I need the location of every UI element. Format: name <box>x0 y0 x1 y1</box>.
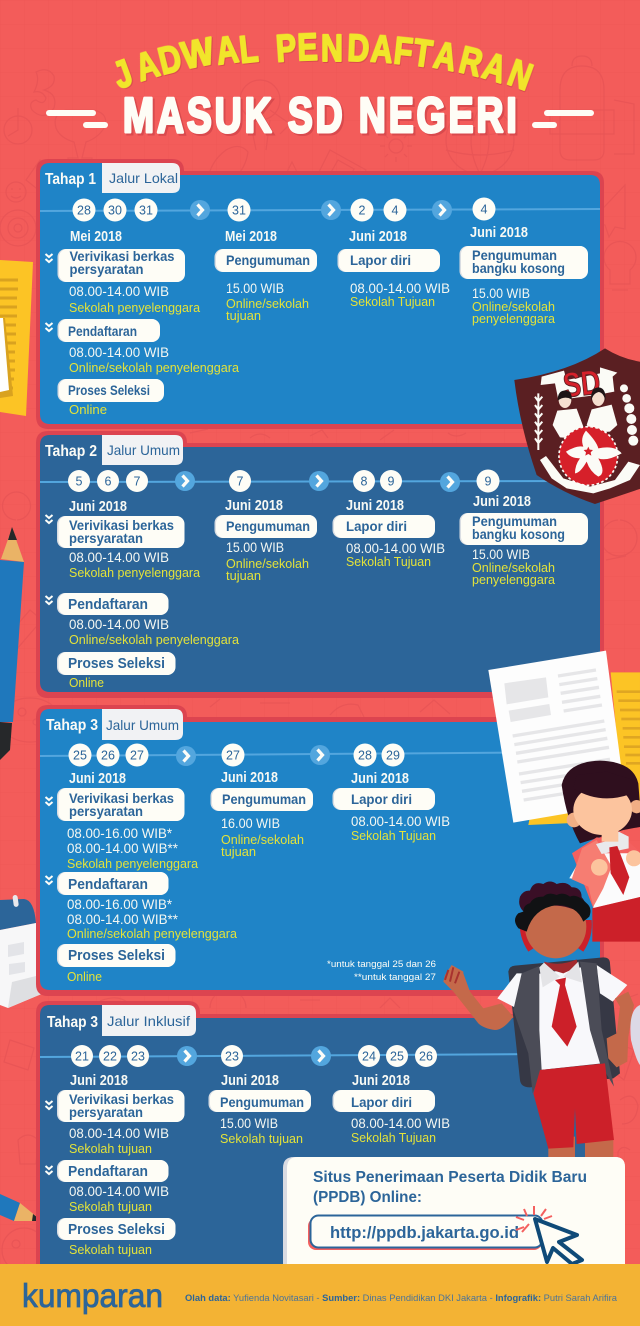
timeline: 22 <box>103 1050 117 1064</box>
timeline: 21 <box>75 1050 89 1064</box>
column: pengumuman: tujuan <box>226 308 261 323</box>
column: pengumuman <box>208 1073 311 1146</box>
heading: Jadwal Pendaftaran: W <box>178 29 218 77</box>
column: bangku kosong <box>460 494 588 587</box>
timeline: 4 <box>392 204 399 218</box>
column: pengumuman: tujuan <box>226 568 261 583</box>
column: lapor diri <box>338 229 450 309</box>
column: seleksi: 08.00-14.00 WIB <box>69 283 169 299</box>
timeline: 27 <box>130 748 144 762</box>
heading: Jadwal Pendaftaran: J <box>108 52 138 97</box>
column: lapor diri <box>332 771 450 843</box>
emblem: SD shield: SD <box>561 363 602 405</box>
timeline <box>40 744 600 766</box>
timeline: 31 <box>232 204 246 218</box>
column: seleksi: Verivikasi berkas <box>69 1091 174 1107</box>
URL box <box>308 1216 542 1250</box>
tab: jalur umum <box>46 709 183 740</box>
column: seleksi <box>46 1073 184 1257</box>
column: seleksi: 08.00-14.00 WIB** <box>67 840 179 856</box>
column: lapor diri: Juni 2018 <box>346 498 404 514</box>
column: seleksi: Juni 2018 <box>70 1073 128 1089</box>
column: seleksi: persyaratan <box>69 1104 143 1120</box>
column: seleksi: Mei 2018 <box>70 229 122 245</box>
decoration: paper and yellow sheet <box>488 651 640 825</box>
column: lapor diri: 08.00-14.00 WIB <box>346 540 445 556</box>
card: PPDB website <box>283 1157 625 1264</box>
column: bangku kosong: 15.00 WIB <box>472 546 530 562</box>
column: seleksi: Juni 2018 <box>69 771 126 787</box>
column: bangku kosong: bangku kosong <box>472 526 565 542</box>
column: lapor diri: 08.00-14.00 WIB <box>350 280 450 296</box>
heading: Jadwal Pendaftaran: E <box>297 27 318 69</box>
column: seleksi: Pendaftaran <box>68 596 148 613</box>
column: pengumuman <box>214 229 317 323</box>
heading: Jadwal Pendaftaran: A <box>431 34 460 80</box>
column: seleksi <box>46 229 240 417</box>
panel: tahap 3 jalur umum <box>36 705 604 996</box>
column: seleksi: Sekolah penyelenggara <box>69 565 201 580</box>
column: pengumuman: Juni 2018 <box>221 770 278 786</box>
column: pengumuman: 16.00 WIB <box>221 815 280 831</box>
column: lapor diri: Lapor diri <box>350 252 411 268</box>
timeline: 29 <box>386 748 400 762</box>
tab: jalur lokal: Jalur Lokal <box>109 170 178 186</box>
tab: jalur lokal <box>45 163 180 193</box>
column: pengumuman: 15.00 WIB <box>226 280 284 296</box>
column: pengumuman: Juni 2018 <box>225 498 283 514</box>
column: seleksi: Sekolah penyelenggara <box>69 300 201 315</box>
column: pengumuman: Pengumuman <box>226 252 310 268</box>
column: pengumuman: Pengumuman <box>226 518 310 534</box>
column: bangku kosong: Pengumuman <box>472 247 557 263</box>
tab: jalur umum <box>45 435 183 465</box>
column: bangku kosong: Juni 2018 <box>473 494 531 510</box>
panel: tahap 2 jalur umum <box>36 431 604 698</box>
heading: Jadwal Pendaftaran: A <box>369 28 394 72</box>
emblem: SD shield <box>514 348 640 504</box>
column: seleksi: Pendaftaran <box>68 1163 148 1180</box>
heading: Jadwal Pendaftaran: R <box>455 39 487 85</box>
illustration: girl student <box>562 761 640 942</box>
column: seleksi: Online/sekolah penyelenggara <box>67 926 238 941</box>
tab: jalur umum: Jalur Umum <box>107 442 180 458</box>
column: seleksi: 08.00-14.00 WIB <box>69 1125 169 1141</box>
timeline: 31 <box>139 204 153 218</box>
timeline: 8 <box>361 474 368 488</box>
column: seleksi: persyaratan <box>70 261 144 277</box>
timeline: 27 <box>226 748 240 762</box>
column: pengumuman: Online/sekolah <box>226 296 309 311</box>
column: seleksi: Proses Seleksi <box>68 947 165 964</box>
footnotes <box>327 959 436 983</box>
column: pengumuman: Pengumuman <box>222 791 306 807</box>
timeline: 23 <box>131 1050 145 1064</box>
timeline <box>40 470 600 492</box>
column: pengumuman: Pengumuman <box>220 1094 304 1110</box>
timeline: 7 <box>237 474 244 488</box>
timeline: 23 <box>225 1050 239 1064</box>
column: seleksi: Sekolah penyelenggara <box>67 856 199 871</box>
decoration: blue pencil <box>0 527 24 760</box>
column: seleksi <box>46 771 238 984</box>
timeline: 25 <box>73 748 87 762</box>
footer credits: Olah data: Yufienda Novitasari - Sumber: Dinas Pendidikan DKI Jakarta - Infografik: Putri Sarah Arifira <box>185 1293 618 1304</box>
column: pengumuman: Online/sekolah <box>221 832 304 847</box>
column: seleksi: Verivikasi berkas <box>69 517 174 533</box>
timeline: 6 <box>105 474 112 488</box>
tab: jalur umum: Tahap 3 <box>46 717 98 734</box>
column: seleksi: 08.00-14.00 WIB <box>69 1183 169 1199</box>
column: seleksi: Sekolah tujuan <box>69 1242 152 1257</box>
column: seleksi: Online/sekolah penyelenggara <box>69 632 240 647</box>
timeline: 28 <box>77 204 91 218</box>
column: bangku kosong: Juni 2018 <box>470 225 528 241</box>
heading: Jadwal Pendaftaran: F <box>392 30 415 74</box>
column: bangku kosong: Pengumuman <box>472 513 557 529</box>
tab: jalur umum: Tahap 2 <box>45 443 97 460</box>
timeline: 26 <box>419 1050 433 1064</box>
decoration: notebook left <box>0 895 51 1008</box>
column: seleksi: 08.00-14.00 WIB <box>69 549 169 565</box>
timeline <box>40 198 600 222</box>
column: seleksi: Juni 2018 <box>69 499 127 515</box>
heading: Masuk SD Negeri: MASUK SD NEGERI <box>123 89 517 143</box>
column: seleksi: Pendaftaran <box>68 323 137 339</box>
column: bangku kosong: penyelenggara <box>472 572 556 587</box>
column: seleksi: Online/sekolah penyelenggara <box>69 360 240 375</box>
card heading <box>313 1169 587 1206</box>
heading: Jadwal Pendaftaran: A <box>214 29 241 73</box>
timeline: 7 <box>134 474 141 488</box>
column: lapor diri: Juni 2018 <box>352 1073 410 1089</box>
card heading: Situs Penerimaan Peserta Didik Baru <box>313 1169 587 1186</box>
column: lapor diri: Lapor diri <box>351 1094 412 1110</box>
column: pengumuman: Sekolah tujuan <box>220 1131 303 1146</box>
timeline <box>40 1045 560 1067</box>
column: seleksi: Proses Seleksi <box>68 382 150 398</box>
heading: Jadwal Pendaftaran: A <box>478 45 511 92</box>
timeline: 30 <box>108 204 122 218</box>
column: seleksi: Verivikasi berkas <box>69 790 174 806</box>
timeline: 2 <box>359 204 366 218</box>
tab: jalur inklusif: Tahap 3 <box>47 1014 98 1031</box>
logo: kumparan: kumparan <box>22 1277 163 1314</box>
column: seleksi: 08.00-14.00 WIB** <box>67 911 179 927</box>
column: seleksi: Sekolah tujuan <box>69 1199 152 1214</box>
illustration: boy student <box>443 895 634 1163</box>
column: lapor diri: Sekolah Tujuan <box>351 828 436 843</box>
column: pengumuman: Mei 2018 <box>225 229 277 245</box>
heading: Jadwal Pendaftaran: D <box>154 37 186 83</box>
heading: Jadwal Pendaftaran: D <box>347 28 370 70</box>
column: seleksi: 08.00-14.00 WIB <box>69 344 169 360</box>
column: seleksi: 08.00-14.00 WIB <box>69 616 169 632</box>
heading: Jadwal Pendaftaran: T <box>411 32 435 76</box>
column: lapor diri: Lapor diri <box>351 791 412 807</box>
tab: jalur lokal: Tahap 1 <box>45 171 96 188</box>
column: pengumuman <box>214 498 317 583</box>
column: seleksi: 08.00-16.00 WIB* <box>67 825 173 841</box>
illustration: boy hair <box>515 881 591 932</box>
column: pengumuman <box>210 770 313 859</box>
timeline: 9 <box>388 474 395 488</box>
column: lapor diri: Sekolah Tujuan <box>350 294 435 309</box>
column: seleksi: 08.00-16.00 WIB* <box>67 896 173 912</box>
panel: tahap 1 jalur lokal <box>36 159 604 429</box>
timeline: 26 <box>101 748 115 762</box>
timeline: 28 <box>358 748 372 762</box>
timeline: 5 <box>76 474 83 488</box>
column: seleksi: Pendaftaran <box>68 876 148 893</box>
column: seleksi: Proses Seleksi <box>68 655 165 672</box>
heading: Jadwal Pendaftaran: A <box>131 43 164 90</box>
title dashes right <box>532 110 594 128</box>
column: pengumuman: 15.00 WIB <box>220 1115 278 1131</box>
decoration: small pencil left <box>0 1194 42 1221</box>
column: seleksi: Verivikasi berkas <box>70 248 175 264</box>
title dashes left <box>46 110 108 128</box>
icon: cursor click <box>516 1206 582 1264</box>
column: lapor diri: Juni 2018 <box>349 229 407 245</box>
illustration: girl leg <box>630 1005 640 1065</box>
column: seleksi: persyaratan <box>69 803 143 819</box>
column: bangku kosong: bangku kosong <box>472 260 565 276</box>
timeline: 25 <box>390 1050 404 1064</box>
column: lapor diri: 08.00-14.00 WIB <box>351 813 450 829</box>
column: lapor diri <box>332 498 445 569</box>
title <box>46 27 594 145</box>
column: seleksi: Sekolah tujuan <box>69 1141 152 1156</box>
tab: jalur inklusif <box>47 1005 196 1036</box>
panel: tahap 3 jalur inklusif <box>36 1001 604 1264</box>
column: pengumuman: tujuan <box>221 844 256 859</box>
column: seleksi: Proses Seleksi <box>68 1221 165 1238</box>
column: pengumuman: Juni 2018 <box>221 1073 279 1089</box>
column: bangku kosong: 15.00 WIB <box>472 285 530 301</box>
column: seleksi: Online <box>69 402 107 417</box>
heading: Masuk SD Negeri: MASUK SD NEGERI <box>125 91 519 145</box>
URL box: http://ppdb.jakarta.go.id <box>330 1223 519 1242</box>
timeline: 9 <box>485 474 492 488</box>
card heading: (PPDB) Online: <box>313 1189 422 1206</box>
column: seleksi <box>46 499 240 690</box>
column: seleksi: persyaratan <box>69 530 143 546</box>
column: bangku kosong <box>460 225 588 326</box>
column: pengumuman: 15.00 WIB <box>226 539 284 555</box>
footer bar <box>0 1264 640 1326</box>
column: seleksi: Online <box>67 969 102 984</box>
column: bangku kosong: Online/sekolah <box>472 560 555 575</box>
column: lapor diri: Sekolah Tujuan <box>351 1130 436 1145</box>
column: lapor diri <box>332 1073 450 1145</box>
tab: jalur umum: Jalur Umum <box>106 717 179 733</box>
column: bangku kosong: penyelenggara <box>472 311 556 326</box>
decoration: yellow note left <box>0 260 33 416</box>
footnotes: *untuk tanggal 25 dan 26 <box>327 959 436 970</box>
column: seleksi: Online <box>69 675 104 690</box>
column: bangku kosong: Online/sekolah <box>472 299 555 314</box>
footnotes: **untuk tanggal 27 <box>354 972 436 983</box>
column: pengumuman: Online/sekolah <box>226 556 309 571</box>
heading: Jadwal Pendaftaran <box>108 27 538 99</box>
column: lapor diri: 08.00-14.00 WIB <box>351 1115 450 1131</box>
heading: Jadwal Pendaftaran: P <box>275 27 298 71</box>
timeline: 4 <box>481 202 488 216</box>
column: lapor diri: Sekolah Tujuan <box>346 554 431 569</box>
column: lapor diri: Juni 2018 <box>351 771 409 787</box>
column: lapor diri: Lapor diri <box>346 518 407 534</box>
heading: Jadwal Pendaftaran: N <box>503 52 538 99</box>
tab: jalur inklusif: Jalur Inklusif <box>107 1013 190 1029</box>
timeline: 24 <box>362 1050 376 1064</box>
heading: Jadwal Pendaftaran: N <box>321 28 343 70</box>
heading: Jadwal Pendaftaran: L <box>237 28 260 72</box>
